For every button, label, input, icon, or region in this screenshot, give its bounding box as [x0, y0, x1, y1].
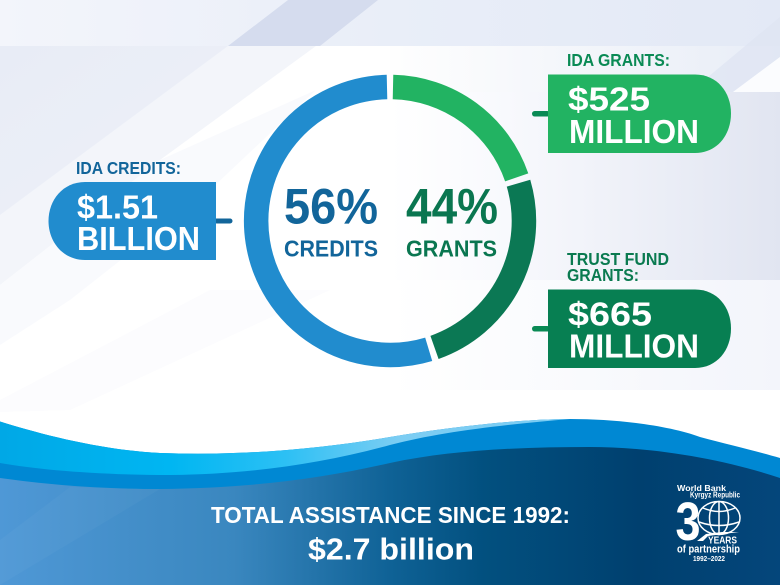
- centre label: grants share: 44%: [406, 178, 498, 234]
- callout: trust fund grants: $665: [568, 296, 652, 332]
- callout: trust fund grants: TRUST FUND: [567, 249, 669, 269]
- logo: 30 years of partnership: YEARS: [708, 536, 737, 546]
- total assistance text: [211, 502, 570, 566]
- segment: credits 56%: [256, 87, 429, 355]
- callout: IDA grants: MILLION: [569, 113, 699, 150]
- segment: trust fund grants: [434, 183, 524, 347]
- centre label: credits share: CREDITS: [284, 236, 378, 262]
- callout: IDA credits: BILLION: [77, 220, 200, 257]
- callout: IDA credits: [48, 158, 232, 260]
- callout: IDA grants: IDA GRANTS:: [567, 50, 670, 70]
- callout: IDA grants: $525: [568, 80, 650, 118]
- centre label: grants share: [406, 178, 498, 262]
- logo: 30 years of partnership: of partnership: [677, 544, 740, 556]
- callout: IDA grants: [532, 50, 731, 153]
- logo: 30 years of partnership: World Bank: [677, 483, 726, 493]
- total assistance text: $2.7 billion: [308, 532, 474, 566]
- callout: trust fund grants: [532, 249, 731, 368]
- segment: IDA grants: [393, 87, 517, 177]
- logo: 30 years of partnership: [676, 483, 740, 563]
- centre label: credits share: [284, 178, 378, 262]
- callout: trust fund grants: MILLION: [569, 328, 699, 364]
- logo: 30 years of partnership: 1992–2022: [693, 556, 725, 563]
- callout: IDA credits: IDA CREDITS:: [76, 158, 181, 178]
- callout: trust fund grants: GRANTS:: [567, 265, 639, 285]
- logo: 30 years of partnership: 3: [676, 492, 700, 552]
- bottom band: wave layers: [0, 419, 780, 585]
- icon: globe: [698, 502, 740, 534]
- centre label: credits share: 56%: [284, 178, 378, 234]
- callout: IDA credits: $1.51: [77, 188, 158, 226]
- logo: 30 years of partnership: Kyrgyz Republic: [690, 490, 740, 500]
- total assistance text: TOTAL ASSISTANCE SINCE 1992:: [211, 502, 570, 528]
- centre label: grants share: GRANTS: [406, 236, 497, 262]
- donut chart: [256, 87, 524, 355]
